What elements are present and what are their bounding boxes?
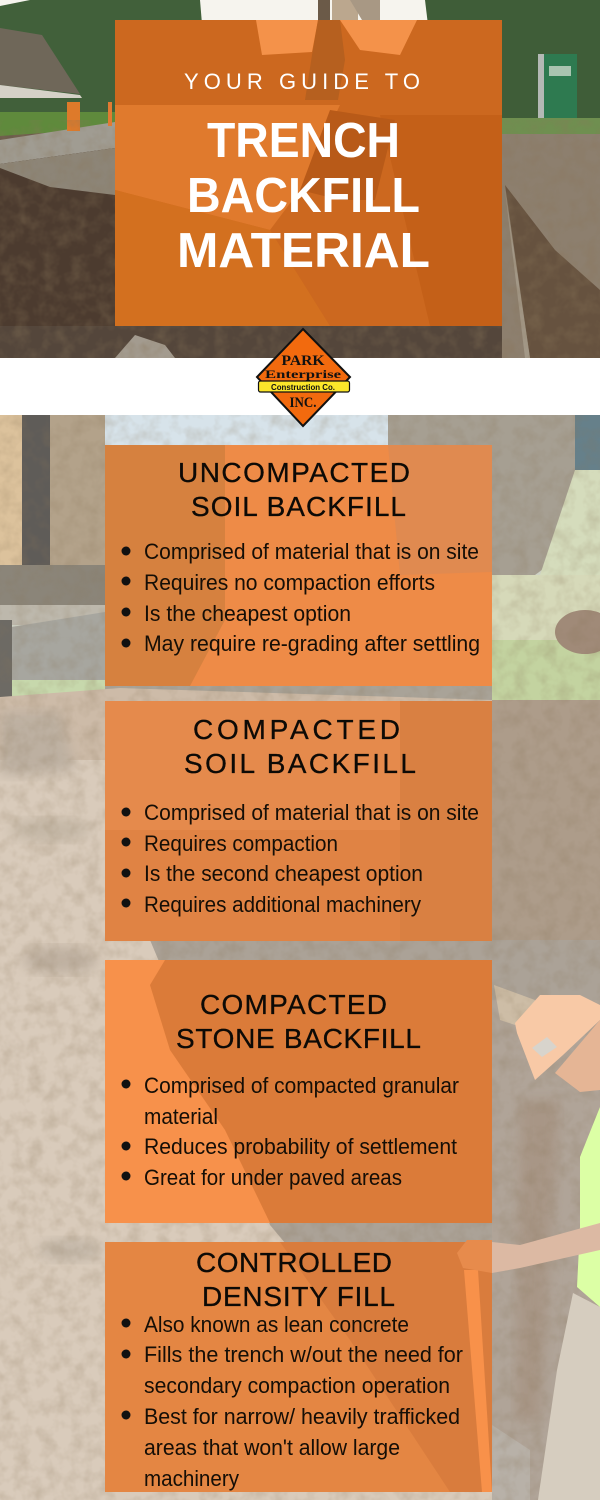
bullet list [122, 1312, 463, 1491]
logo: Park Enterprise Construction Co. Inc. [257, 329, 350, 426]
shovel handle and hand [457, 1240, 492, 1492]
hard hat [515, 995, 600, 1080]
barrels and cones [67, 102, 80, 131]
main title: TRENCH [207, 114, 400, 168]
title panel [115, 20, 502, 326]
bullet list [122, 800, 479, 917]
logo: Park Enterprise Construction Co. Inc.: PARK [282, 353, 325, 369]
bullet list: material [144, 1104, 218, 1129]
heading: CONTROLLED [196, 1247, 392, 1278]
bullet list: areas that won't allow large [144, 1435, 400, 1460]
portable toilet [538, 54, 577, 118]
arm [492, 1223, 600, 1273]
white band [0, 358, 600, 415]
bullet list: Reduces probability of settlement [144, 1134, 457, 1159]
panel: uncompacted soil backfill [105, 445, 492, 686]
bullet list: Comprised of material that is on site [144, 800, 479, 825]
heading: COMPACTED [193, 714, 400, 745]
bullet list: Requires no compaction efforts [144, 570, 435, 595]
subtitle: YOUR GUIDE TO [184, 69, 420, 94]
heading: SOIL BACKFILL [184, 748, 416, 779]
logo: Park Enterprise Construction Co. Inc.: INC. [290, 395, 317, 411]
worker figure [492, 995, 600, 1500]
hi-vis vest [577, 1107, 600, 1307]
bullet list: Great for under paved areas [144, 1165, 402, 1190]
bullet list: Requires additional machinery [144, 892, 421, 917]
logo: Park Enterprise Construction Co. Inc.: Construction Co. [271, 382, 335, 392]
bullet list: Is the second cheapest option [144, 861, 423, 886]
logo: Park Enterprise Construction Co. Inc.: Enterprise [265, 367, 342, 381]
heading [196, 1247, 395, 1312]
heading [178, 457, 410, 522]
panel: controlled density fill [105, 1240, 492, 1492]
heading: SOIL BACKFILL [191, 491, 406, 522]
bullet list: Comprised of material that is on site [144, 539, 479, 564]
bullet list [122, 539, 480, 656]
heading [176, 989, 421, 1054]
main title: BACKFILL [187, 169, 420, 223]
bullet list: Is the cheapest option [144, 601, 351, 626]
lower background photo: worker in trench with excavator [0, 415, 600, 1500]
main title: MATERIAL [177, 224, 430, 278]
heading: DENSITY FILL [202, 1281, 395, 1312]
heading: UNCOMPACTED [178, 457, 410, 488]
bullet list: Also known as lean concrete [144, 1312, 409, 1337]
bullet list: machinery [144, 1466, 239, 1491]
bullet list [122, 1073, 459, 1190]
main title [177, 114, 430, 278]
bullet list: Requires compaction [144, 831, 338, 856]
bullet list: Comprised of compacted granular [144, 1073, 459, 1098]
bullet list: May require re-grading after settling [144, 631, 480, 656]
bullet list: secondary compaction operation [144, 1373, 450, 1398]
heading: COMPACTED [200, 989, 387, 1020]
trousers [538, 1293, 600, 1500]
excavator and grass area [0, 415, 600, 700]
bullet list: Fills the trench w/out the need for [144, 1342, 463, 1367]
bullet list: Best for narrow/ heavily trafficked [144, 1404, 460, 1429]
soil and trench [0, 688, 600, 760]
panel: compacted stone backfill [105, 960, 492, 1223]
heading [184, 714, 416, 779]
header photo: trench excavation site [0, 0, 600, 358]
panel: compacted soil backfill [105, 701, 492, 941]
bucket [0, 28, 80, 94]
heading: STONE BACKFILL [176, 1023, 421, 1054]
